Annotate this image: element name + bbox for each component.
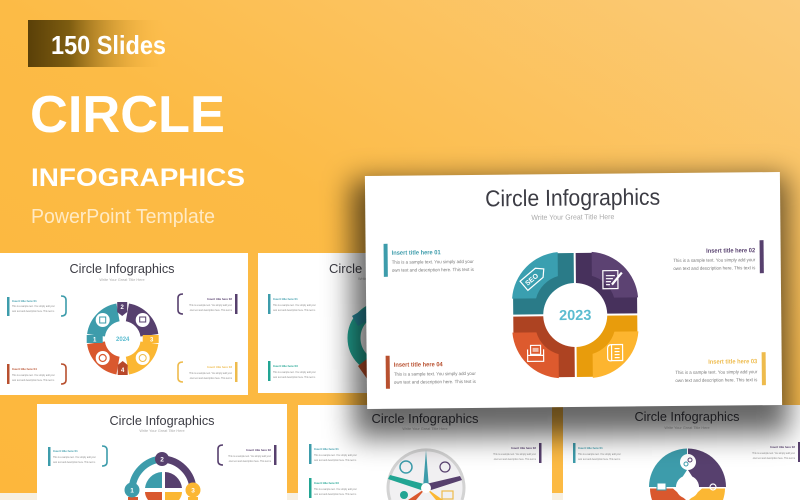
panel: slide preview green [258,253,437,393]
text block 01: Insert title here 01 [273,297,298,301]
text block 04: This is a sample text. You simply add your [394,371,476,377]
text block 02: Insert title here 02 [706,247,756,255]
text block 01 [7,296,66,316]
panel: slide preview 2024 [0,253,248,395]
text block 04: own text and description here. This text is [394,379,477,385]
text block 01: own text and description here. This text is [12,310,55,313]
slide title: Circle Infographics [329,261,437,276]
text block 03 [675,352,766,386]
panel: slide preview ring [37,404,287,500]
ring diagram: 2 [160,456,164,464]
icon: inbox [528,345,544,361]
text block 03: Insert title here 03 [273,364,298,368]
text block 02: This is a sample text. You simply add your [752,452,795,455]
text block 01: Insert title here 01 [578,446,603,450]
icon: document and pen [603,271,622,289]
text block 01: This is a sample text. You simply add your [314,454,357,457]
heading: infographics: INFOGRAPHICS [31,164,245,192]
main subtitle: Write Your Great Title Here [531,212,614,222]
text block 03: Insert title here 03 [314,481,339,485]
text block 02: own text and description here. This text is [673,265,756,271]
text block 01: own text and description here. This text is [392,267,475,273]
badge: 150 slides [28,20,166,67]
text block 01: own text and description here. This text is [273,309,316,312]
segment: orange [512,316,575,379]
text block 04: own text and description here. This text is [12,379,55,382]
donut chart quarters [649,448,726,500]
segment: teal [512,252,574,315]
donut chart 2024: 2024 [116,337,130,343]
segment: purple [576,251,638,314]
text block 03 [268,361,316,381]
text block 02: own text and description here. This text is [190,309,233,312]
text block 03: own text and description here. This text is [190,377,233,380]
main title: Circle Infographics [485,184,660,211]
main slide shadow [351,176,789,438]
panel: slide preview quarters [563,405,800,500]
text block 02: own text and description here. This text is [494,458,537,461]
slide subtitle: Write Your Great Title Here [664,426,710,430]
text block 03: own text and description here. This text is [273,376,316,379]
text block 01: own text and description here. This text is [53,461,96,464]
text block 02 [178,294,238,314]
wheel diagram [388,450,464,500]
text block 03: own text and description here. This text is [314,493,357,496]
slide title: Circle Infographics [372,411,479,426]
text block 04: This is a sample text. You simply add your [12,374,55,377]
text block 01: Insert title here 01 [314,447,339,451]
ring diagram: 3 [191,488,195,494]
text block 04: Insert title here 04 [394,361,443,369]
text block 02: This is a sample text. You simply add your [228,455,271,458]
subtitle: powerpoint template: PowerPoint Template [31,206,215,228]
text block 03: Insert title here 03 [207,365,232,369]
text block 01: This is a sample text. You simply add your [273,304,316,307]
text block 01 [268,294,316,314]
text block 02 [218,445,276,465]
slide subtitle: Write Your Great Title Here [402,427,448,431]
donut chart 2024: 3 [150,338,154,344]
text block 01: This is a sample text. You simply add your [392,259,474,265]
slide subtitle: Write Your Great Title Here [139,429,185,433]
text block 01: own text and description here. This text is [314,459,357,462]
text block 01: Insert title here 01 [392,249,441,257]
donut chart 2024: 1 [93,338,97,344]
text block 03: This is a sample text. You simply add your [273,371,316,374]
text block 02: Insert title here 02 [246,448,271,452]
text block 01: This is a sample text. You simply add your [12,305,55,308]
text block 02: This is a sample text. You simply add your [189,304,232,307]
text block 03: This is a sample text. You simply add your [314,488,357,491]
badge: 150 slides: 150 Slides [51,30,166,60]
slide title: Circle Infographics [110,413,215,428]
ring diagram: 1 [130,488,134,494]
text block 01: own text and description here. This text is [578,458,621,461]
text block 01 [309,444,357,464]
text block 02: Insert title here 02 [207,297,232,301]
panel: slide preview wheel [298,405,552,500]
text block 02: own text and description here. This text is [753,457,796,460]
donut chart green [352,300,414,380]
donut chart 2024 [87,302,159,375]
text block 04 [7,364,66,384]
ring diagram [124,452,200,500]
text block 04: Insert title here 04 [12,367,37,371]
slide title: Circle Infographics [70,261,175,276]
slide title: Circle Infographics [634,409,740,424]
text block 01 [384,243,475,277]
text block 02: own text and description here. This text is [229,460,272,463]
text block 01: Insert title here 01 [53,449,78,453]
icon: seo tag: SEO [524,272,541,288]
text block 03 [178,362,238,382]
segment: yellow [576,315,639,378]
text block 02: Insert title here 02 [511,446,536,450]
text block 02: This is a sample text. You simply add your [493,453,536,456]
text block 01: Insert title here 01 [12,299,37,303]
text block 03: This is a sample text. You simply add your [675,369,758,375]
text block 01 [573,443,621,463]
text block 01: This is a sample text. You simply add your [53,456,96,459]
text block 04 [386,355,477,389]
text block 02: This is a sample text. You simply add your [673,257,756,263]
text block 01 [48,446,107,466]
panel: main slide [365,172,782,409]
slide subtitle: Write Your Great Title Here [99,278,145,282]
text block 03 [309,478,357,498]
text block 03: This is a sample text. You simply add your [189,372,232,375]
slide subtitle: Write Your Great Title Here [358,277,403,281]
donut chart 2024: 4 [121,368,125,374]
donut chart 2023 [512,251,639,379]
icon: telephone [608,345,623,361]
heading: circle: CIRCLE [30,86,225,144]
text block 02 [752,442,800,462]
text block 03: Insert title here 03 [708,358,758,366]
text block 03: own text and description here. This text is [675,377,758,383]
text block 02 [493,443,542,463]
text block 01: This is a sample text. You simply add your [578,453,621,456]
text block 02 [673,240,764,274]
center year label: 2023 [559,308,591,324]
text block 02: Insert title here 02 [770,445,795,449]
donut chart 2024: 2 [121,305,125,311]
